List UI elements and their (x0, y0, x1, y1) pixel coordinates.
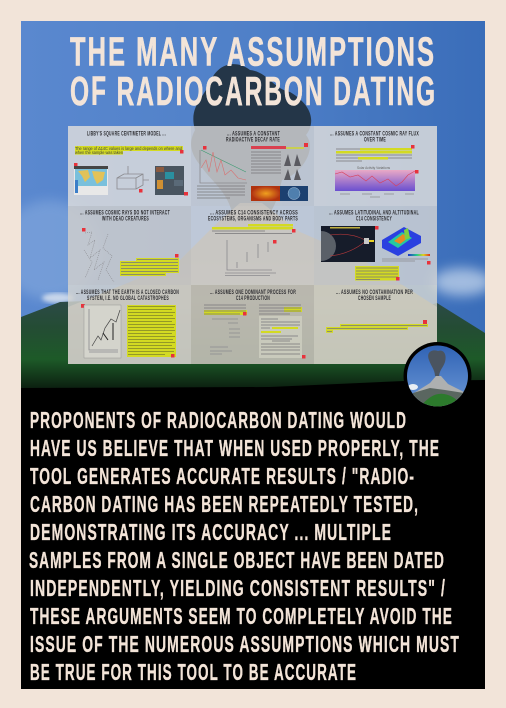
title (70, 28, 437, 114)
black text panel background (21, 380, 485, 689)
panel: closed carbon system, no global catastrophes: SYSTEM, I.E. NO GLOBAL CATASTROPHES (87, 295, 169, 302)
panel: latitudinal and altitudinal C14 consistency: C14 CONSISTENCY (356, 216, 392, 222)
panel: latitudinal and altitudinal C14 consistency (314, 206, 437, 285)
panel: cosmic rays do not interact with dead creatures: ... ASSUMES COSMIC RAYS DO NOT INTERACT (80, 210, 170, 216)
panel: one dominant process for C14 production (191, 285, 314, 364)
panel: one dominant process for C14 production: C14 PRODUCTION (236, 295, 270, 302)
panel: no contamination per chosen sample (314, 285, 437, 364)
panel: no contamination per chosen sample: ... ASSUMES NO CONTAMINATION PER (336, 289, 413, 296)
panel: no contamination per chosen sample: CHOSEN SAMPLE (358, 295, 391, 302)
panel: closed carbon system, no global catastrophes (68, 285, 191, 364)
panel: Libby's square centimeter model (68, 126, 191, 206)
panel: Libby's square centimeter model: when the sample was taken (75, 150, 124, 155)
panel: closed carbon system, no global catastrophes: ... ASSUMES THAT THE EARTH IS A CLOSED CARBON (76, 289, 179, 296)
panel: Libby's square centimeter model: LIBBY'S SQUARE CENTIMETER MODEL ... (87, 130, 166, 138)
panel: cosmic rays do not interact with dead creatures: WITH DEAD CREATURES (102, 216, 149, 222)
panel: latitudinal and altitudinal C14 consistency: ... ASSUMES LATITUDINAL AND ALTITUDINAL (329, 210, 419, 216)
panel: cosmic rays do not interact with dead creatures (68, 206, 191, 285)
panel: Libby's square centimeter model: The range of Δ14C values is large and depends on where and (75, 146, 183, 151)
panel: C14 consistency across ecosystems: ECOSYSTEMS, ORGANISMS AND BODY PARTS (208, 216, 298, 222)
panel: constant cosmic ray flux: Solar Activity Variations (357, 166, 390, 170)
panel: constant cosmic ray flux: OVER TIME (364, 136, 386, 144)
panel: constant radioactive decay rate: RADIOACTIVE DECAY RATE (226, 136, 280, 144)
panel: constant cosmic ray flux: ... ASSUMES A CONSTANT COSMIC RAY FLUX (330, 130, 419, 138)
background photo: erupting volcano (0, 21, 492, 391)
panel: C14 consistency across ecosystems (191, 206, 314, 285)
panel grid: nine assumptions (68, 126, 437, 364)
panel: constant radioactive decay rate (191, 126, 314, 206)
panel: constant cosmic ray flux (314, 126, 437, 206)
icon: circular volcano photo (404, 342, 472, 410)
text block: main argument (29, 407, 460, 685)
panel: C14 consistency across ecosystems: ... ASSUMES C14 CONSISTENCY ACROSS (210, 210, 298, 216)
panel: constant radioactive decay rate: ... ASSUMES A CONSTANT (227, 130, 280, 138)
panel: one dominant process for C14 production: ... ASSUMES ONE DOMINANT PROCESS FOR (210, 289, 296, 296)
